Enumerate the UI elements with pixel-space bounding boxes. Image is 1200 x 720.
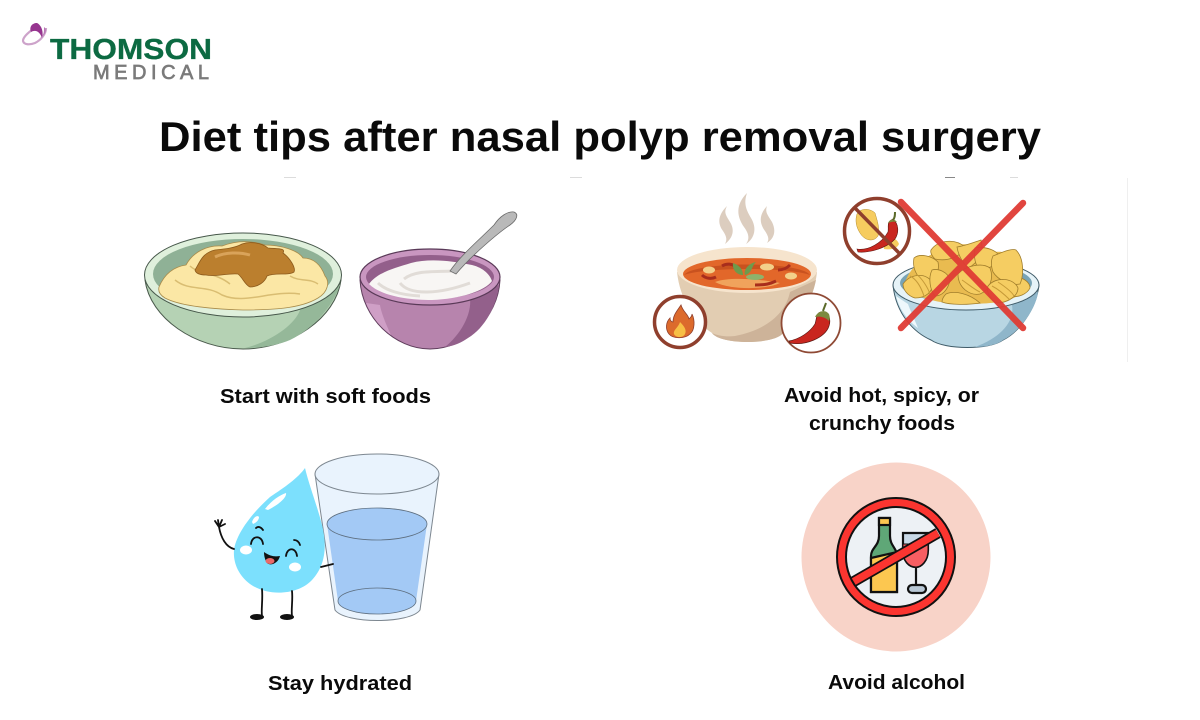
icon: red cross [901,202,1023,328]
logo wordmark: Thomson: THOMSON [50,34,212,66]
panel: avoid alcohol [802,462,990,694]
label: stay hydrated: Stay hydrated [268,672,412,695]
icon: chips bowl [893,240,1039,348]
icon: steam [719,193,774,244]
label: avoid hot, spicy, crunchy: Avoid hot, spicy, or [784,384,979,407]
icon: water drop character [215,468,333,620]
panel: avoid hot, spicy, crunchy [654,193,1039,435]
icon: bowl of spicy soup [677,247,817,342]
logo: Thomson Medical [23,23,212,84]
icon: butterfly [23,23,46,44]
panel: soft foods [144,212,517,408]
label: avoid hot, spicy, crunchy: crunchy foods [809,412,955,435]
icon: no alcohol sign [842,502,950,612]
title: Diet tips after nasal polyp removal surgery [159,113,1041,160]
cropped artifact edge: faint line and fragments [284,177,1128,362]
icon: green bowl of mashed potato [144,233,342,349]
panel: stay hydrated [215,454,439,695]
icon: flame badge [654,296,706,348]
label: avoid alcohol: Avoid alcohol [828,671,965,694]
label: soft foods: Start with soft foods [220,385,431,408]
icon: glass of water [315,454,439,620]
icon: no chips or chili badge [844,198,910,264]
label: avoid hot, spicy, crunchy [784,384,979,435]
logo wordmark: Medical: MEDICAL [93,62,209,84]
icon: purple bowl of yoghurt with spoon [360,212,517,349]
icon: peach circle [802,462,990,652]
icon: chili badge [782,294,840,352]
